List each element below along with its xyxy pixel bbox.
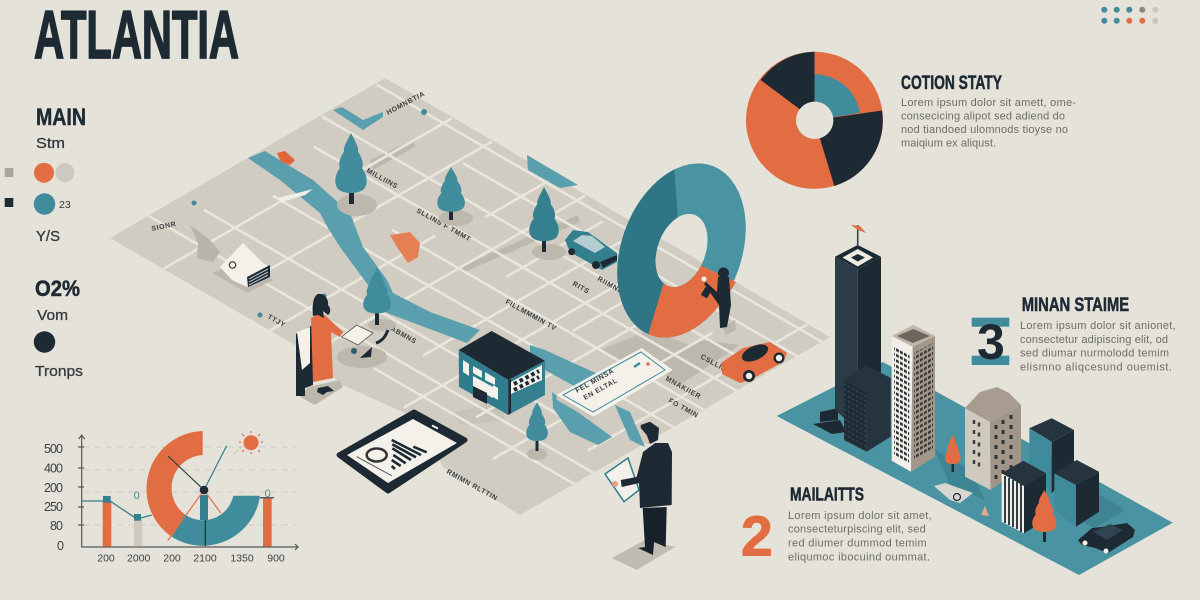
person at donut [701, 268, 736, 335]
tower shadow strips [813, 408, 846, 434]
base shadows [935, 450, 985, 500]
number 3 badge: 3 [977, 314, 1005, 370]
teal car [565, 230, 617, 270]
teal block back [1029, 418, 1074, 493]
river: lower strips [552, 392, 645, 447]
body copy: consecteturpiscing elit, sed [788, 524, 926, 536]
street labels: RMIMN RLTTIN [445, 469, 498, 502]
street labels: ABMNS [389, 326, 418, 346]
river: right branch [527, 155, 578, 188]
orange tree small [945, 435, 961, 472]
y axis labels: 250 [44, 500, 63, 514]
text block: minan staime [972, 295, 1176, 374]
y axis labels: 200 [44, 481, 63, 495]
street labels: SLLINS F TMMT [415, 208, 472, 243]
y axis labels: 400 [44, 462, 63, 476]
bar 1 [103, 496, 111, 546]
value labels [134, 488, 271, 502]
legend swatch: gray square [5, 168, 13, 177]
gray blob: park [190, 225, 220, 262]
legend swatch: dark square [5, 198, 13, 207]
x axis labels: 200 [163, 553, 181, 565]
white vehicle [934, 483, 973, 503]
map roads [110, 80, 830, 495]
body copy [788, 510, 932, 564]
legend label: Vom: Vom [37, 307, 68, 324]
legend heading: MAIN [36, 104, 86, 131]
person with clipboard [605, 422, 675, 570]
y axis labels [44, 442, 64, 553]
body copy: consecicing alipot sed adiend do [901, 110, 1065, 122]
legend dot: dark [34, 331, 55, 353]
plane marker on river [278, 189, 313, 202]
legend dot: orange [34, 163, 54, 183]
x axis labels: 900 [267, 553, 285, 565]
white striped tower [892, 325, 935, 472]
legend label: Stm: Stm [36, 135, 65, 152]
dark car [1078, 523, 1135, 554]
center bar and needles [168, 446, 227, 546]
panel: left legend [5, 104, 86, 380]
heading: MINAN STAIME [1022, 295, 1129, 316]
legend dot: light [56, 163, 74, 182]
text block: mailaitts [741, 484, 932, 569]
body copy [1020, 320, 1176, 374]
street labels: TTJY [266, 314, 286, 329]
body copy: Lorem ipsum dolor sit anionet, [1020, 320, 1176, 332]
trend line [82, 501, 152, 519]
x axis labels: 2100 [193, 553, 217, 565]
tree 2 [437, 167, 473, 226]
street labels: RITS [571, 281, 590, 296]
body copy: sed diumar nurmolodd temim [1020, 348, 1169, 360]
decorative dots [1101, 7, 1158, 24]
teal block front [1054, 460, 1099, 527]
street labels: HOMNBTIA [386, 91, 426, 117]
body copy: Lorem ipsum dolor sit amet, [788, 510, 932, 522]
x axis labels [97, 553, 285, 565]
value labels: 0 [134, 490, 140, 502]
street labels [151, 91, 727, 502]
traffic cone [981, 506, 989, 516]
river [248, 151, 480, 343]
white house [212, 243, 273, 293]
gridlines [84, 447, 296, 525]
body copy: eliqumoc ibocuind oummat. [788, 552, 930, 564]
body copy: consectetur adipiscing elit, od [1020, 334, 1168, 346]
person with orange coat [296, 294, 388, 405]
street labels: CSLLIS [699, 354, 727, 374]
body copy: red diumer dummod temim [788, 538, 927, 550]
tan mid-rise [965, 387, 1021, 490]
map base [110, 78, 830, 515]
body copy: maiqium ex aliqust. [901, 138, 996, 150]
ring chart: teal segment [172, 496, 260, 546]
y axis labels: 80 [50, 519, 63, 533]
document card: FEL MINSA [575, 368, 616, 395]
orange tree large [1032, 490, 1056, 542]
orange car [721, 341, 787, 383]
panel: isometric skyline [777, 225, 1173, 575]
tall tower [835, 225, 881, 430]
orange blob: district [390, 232, 420, 263]
heading: COTION STATY [901, 73, 1002, 94]
number 2: 2 [741, 505, 773, 569]
y axis labels: 500 [44, 442, 63, 456]
river: ribbon behind building [530, 345, 600, 392]
x axis labels: 2000 [127, 553, 151, 565]
body copy: nod tiandoed ulomnods tioyse no [901, 124, 1068, 136]
tree 4 [529, 187, 566, 260]
body copy [901, 97, 1076, 150]
combo chart [44, 431, 298, 565]
pie chart [746, 52, 883, 189]
sun icon [234, 431, 263, 454]
body copy: Lorem ipsum dolor sit amett, ome- [901, 97, 1076, 109]
skyline base [777, 362, 1173, 575]
bar 2 [134, 514, 142, 546]
legend label: Y/S: Y/S [36, 228, 60, 245]
map shaded blocks [370, 140, 740, 425]
tablet [339, 412, 465, 491]
ring chart: orange segment [147, 431, 203, 537]
bar 3 [260, 497, 274, 546]
document card: EN ELTAL [583, 377, 619, 402]
legend label: Tronps: Tronps [35, 363, 83, 380]
large donut chart [617, 164, 746, 338]
street labels: SIONR [151, 221, 177, 233]
x axis labels: 1350 [230, 553, 254, 565]
street labels: RIIMNE [596, 276, 624, 295]
panel: isometric city map [110, 78, 830, 515]
river: upper branch [333, 107, 383, 130]
low dark building [844, 365, 891, 452]
value labels: 0 [265, 488, 271, 500]
small map pins [192, 109, 427, 318]
central building [459, 331, 545, 415]
street labels: MNAKIIER [664, 376, 702, 401]
body copy: elismno aliqcesund ouemist. [1020, 362, 1172, 374]
legend stat: O2% [35, 276, 80, 301]
axes [78, 435, 298, 550]
street labels: FILLMMMIN TV [504, 299, 558, 333]
street labels: MILLIINS [365, 168, 399, 191]
legend value: 23 [59, 199, 71, 211]
tree 3 [363, 268, 396, 331]
y axis labels: 0 [57, 539, 64, 553]
street labels: FO TMIN [667, 398, 699, 420]
tree 1 [335, 133, 377, 216]
striped block [1002, 461, 1046, 533]
heading: MAILAITTS [790, 484, 864, 505]
document card [557, 348, 673, 421]
x axis labels: 200 [97, 553, 115, 565]
text block: cotion staty [901, 73, 1076, 150]
tree 5 [526, 402, 548, 460]
legend dot: teal [34, 193, 55, 215]
orange blob: marker [277, 151, 295, 165]
